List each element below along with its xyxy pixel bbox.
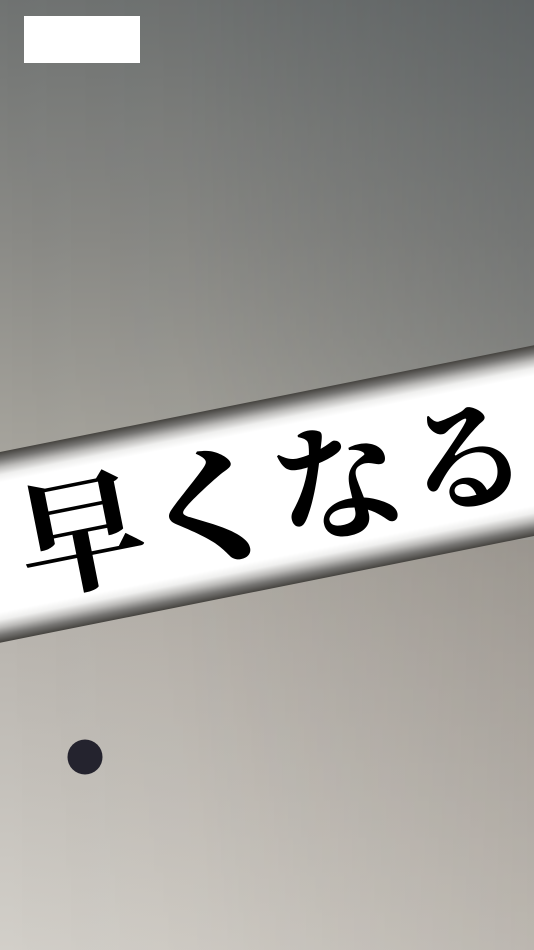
dark dot [68, 740, 102, 774]
banner heading: く [117, 426, 305, 597]
banner strip [0, 323, 534, 647]
banner heading: な [262, 404, 415, 569]
banner heading [5, 379, 534, 620]
white label box [24, 16, 140, 63]
diagonal banner [0, 323, 534, 647]
banner heading: 早 [5, 456, 158, 620]
